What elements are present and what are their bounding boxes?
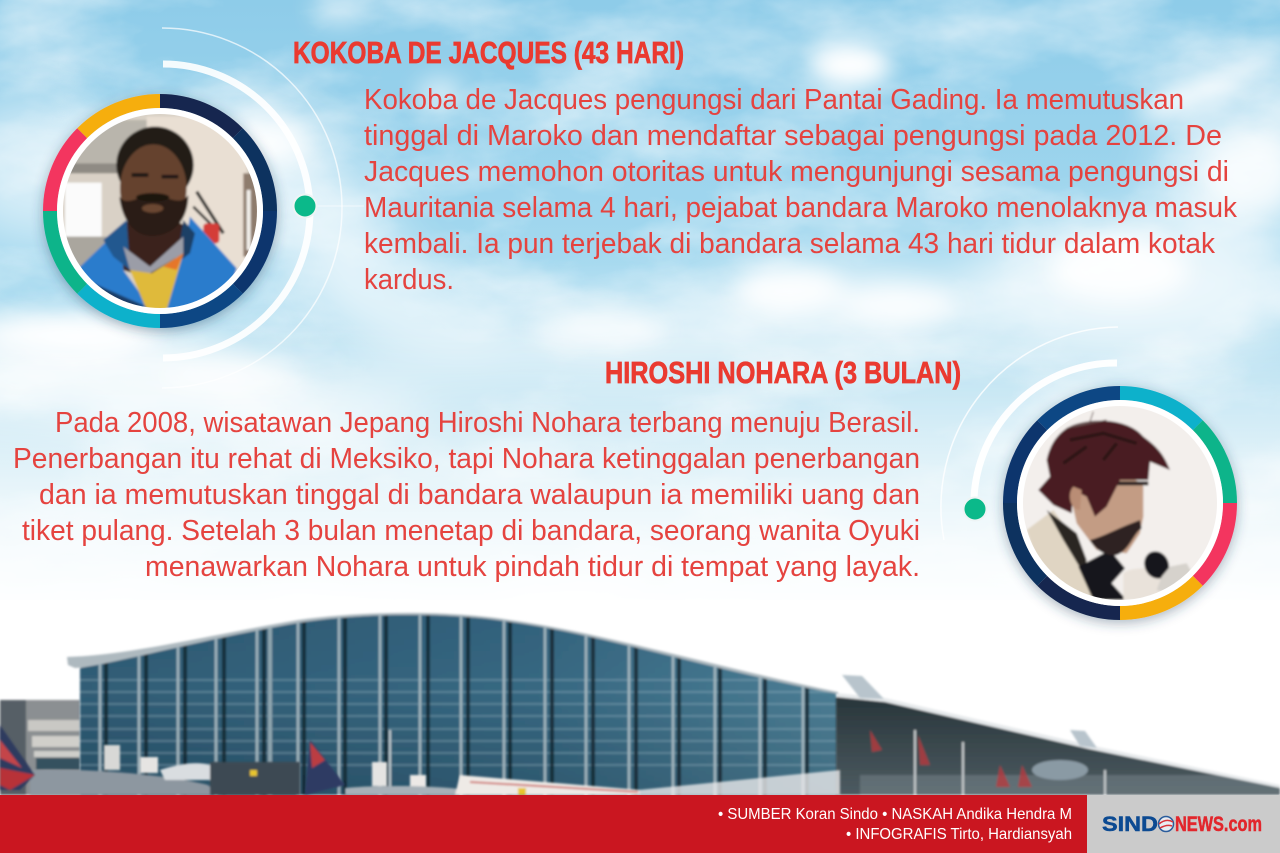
person 2: decorative arcs — [941, 327, 1118, 540]
person 2: body text: menawarkan Nohara untuk pindah tidur di tempat yang layak. — [145, 551, 920, 583]
person 2: body text: Pada 2008, wisatawan Jepang Hiroshi Nohara terbang menuju Berasil. — [55, 407, 920, 439]
SINDOnews logo: SIND — [1102, 813, 1158, 836]
planes and ground vehicles — [0, 725, 840, 795]
glass hall — [67, 600, 840, 795]
person 2: body text: dan ia memutuskan tinggal di bandara walaupun ia memiliki uang dan — [39, 479, 920, 511]
person 2: heading: HIROSHI NOHARA (3 BULAN) — [605, 355, 961, 390]
person 1: body text: kardus. — [364, 264, 454, 296]
footer bar — [0, 795, 1280, 853]
parking structure — [0, 700, 80, 795]
credits: • SUMBER Koran Sindo • NASKAH Andika Hendra M — [718, 806, 1072, 823]
SINDOnews logo — [1102, 813, 1262, 836]
person 1: body text: Jacques memohon otoritas untuk mengunjungi sesama pengungsi di — [364, 156, 1229, 188]
person 2: green connector dot — [964, 498, 986, 520]
person 1: green connector dot — [294, 194, 316, 218]
airport terminal building — [0, 600, 1280, 795]
person 1: body text — [364, 84, 1237, 296]
person 1: body text: kembali. Ia pun terjebak di bandara selama 43 hari tidur dalam kotak — [364, 228, 1215, 260]
person 1: decorative arcs — [162, 28, 364, 388]
person 1: body text: Mauritania selama 4 hari, pejabat bandara Maroko menolaknya masuk — [364, 192, 1237, 224]
person 1: body text: tinggal di Maroko dan mendaftar sebagai pengungsi pada 2012. De — [364, 120, 1222, 152]
credits — [718, 806, 1072, 843]
person 2: body text — [13, 407, 920, 583]
person 2: body text: tiket pulang. Setelah 3 bulan menetap di bandara, seorang wanita Oyuki — [22, 515, 920, 547]
person 1: photo portrait with colour ring — [50, 101, 270, 321]
person 1: body text: Kokoba de Jacques pengungsi dari Pantai Gading. Ia memutuskan — [364, 84, 1184, 116]
person 2: photo portrait with colour ring — [1010, 393, 1230, 613]
person 2: body text: Penerbangan itu rehat di Meksiko, tapi Nohara ketinggalan penerbangan — [13, 443, 920, 475]
credits: • INFOGRAFIS Tirto, Hardiansyah — [846, 826, 1072, 843]
person 1: heading: KOKOBA DE JACQUES (43 HARI) — [293, 35, 684, 70]
lower wing — [836, 675, 1280, 795]
